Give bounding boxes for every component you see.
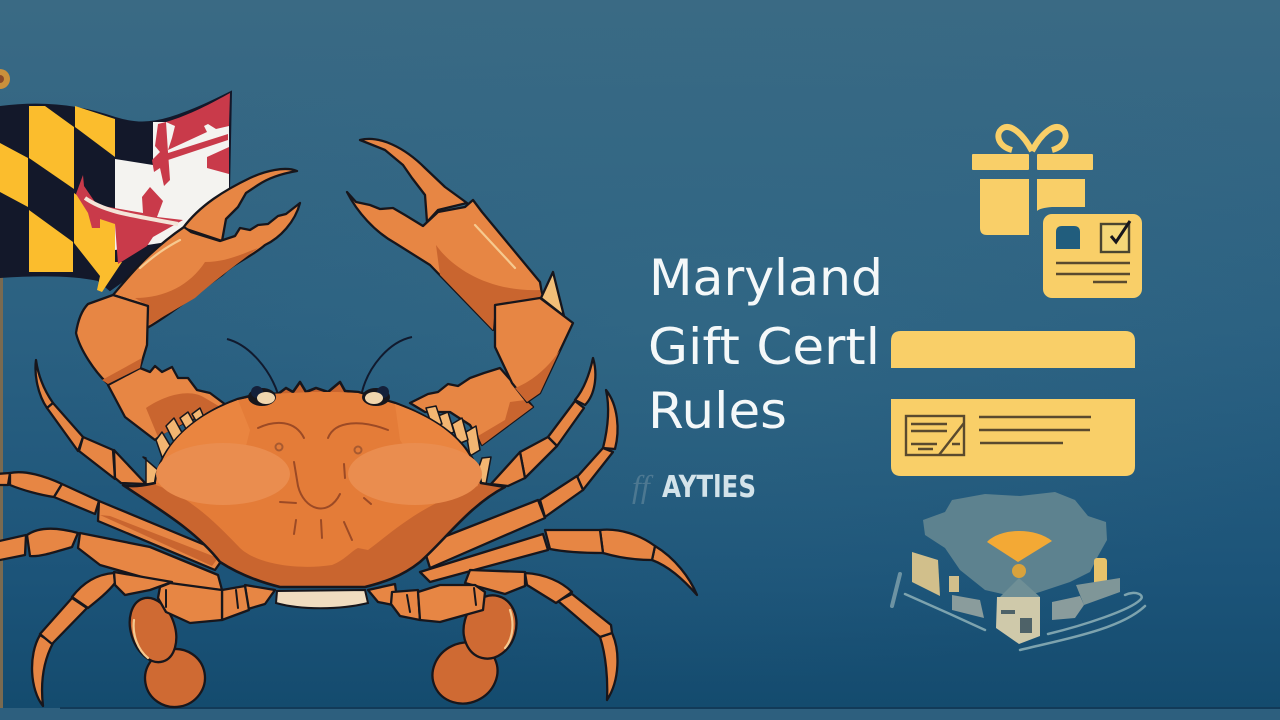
right merus	[495, 298, 573, 402]
flag white quarter	[115, 122, 229, 250]
gold fan	[987, 531, 1052, 562]
antennae	[227, 337, 412, 394]
teeth under right claw	[426, 406, 491, 484]
crab carapace	[123, 382, 505, 587]
carapace shell lobes	[156, 443, 290, 505]
banner bar	[891, 331, 1135, 368]
subtitle: AYTlES	[662, 470, 756, 505]
left walking leg 1	[35, 360, 146, 484]
flag pole and finial	[0, 69, 10, 708]
left walking leg 2	[0, 472, 222, 570]
carapace face markings	[258, 423, 388, 540]
side buildings	[912, 552, 1120, 620]
icon: Maryland map with state house	[892, 492, 1145, 650]
leg bases, left	[158, 583, 275, 623]
left swimming paddle	[122, 592, 210, 712]
title	[648, 249, 883, 440]
left pincer upper finger	[183, 169, 297, 241]
teeth under left claw	[143, 408, 206, 484]
title: Gift Certl	[648, 318, 880, 376]
shoreline strokes	[892, 574, 1145, 650]
subtitle	[632, 468, 756, 505]
right pincer palm and lower finger	[347, 192, 543, 330]
map silhouette	[923, 492, 1107, 598]
carapace lighter centre	[156, 392, 478, 567]
certificate card	[891, 399, 1135, 476]
state house	[996, 578, 1040, 644]
title: Rules	[648, 382, 787, 440]
crab belly plate	[276, 590, 368, 608]
subtitle: ff	[632, 468, 654, 504]
right walking leg 2	[425, 390, 618, 568]
right pincer upper finger	[360, 139, 467, 222]
left merus	[76, 295, 148, 384]
right walking leg 4	[465, 570, 617, 700]
flag red crossbottony	[76, 93, 230, 264]
left walking leg 3	[0, 529, 222, 590]
illustration: blue crab	[0, 139, 697, 714]
gift bow	[998, 127, 1066, 151]
left pincer palm and lower finger	[113, 203, 300, 328]
icon: gift box	[972, 127, 1093, 235]
crab eyes	[248, 386, 390, 406]
left carpus	[108, 366, 226, 440]
title: Maryland	[649, 249, 883, 307]
right walking leg 3	[420, 530, 697, 595]
icon: card with checkbox	[1043, 214, 1142, 298]
flag field	[0, 92, 231, 290]
left walking leg 4	[32, 572, 172, 706]
icon: Maryland flag	[0, 69, 231, 708]
flag white stripe	[85, 198, 178, 224]
right walking leg 1	[491, 358, 595, 486]
right claw spike	[541, 272, 564, 316]
mini certificate icon	[906, 416, 964, 455]
dome finial	[1012, 564, 1026, 578]
certificate text lines	[979, 417, 1091, 443]
flag yellow checks	[0, 106, 122, 292]
right swimming paddle	[422, 589, 523, 714]
carapace bright upper area	[156, 400, 250, 483]
right carpus	[410, 368, 533, 445]
right claw arm	[347, 139, 573, 445]
leg bases, right	[368, 584, 485, 622]
left claw arm	[76, 169, 300, 440]
